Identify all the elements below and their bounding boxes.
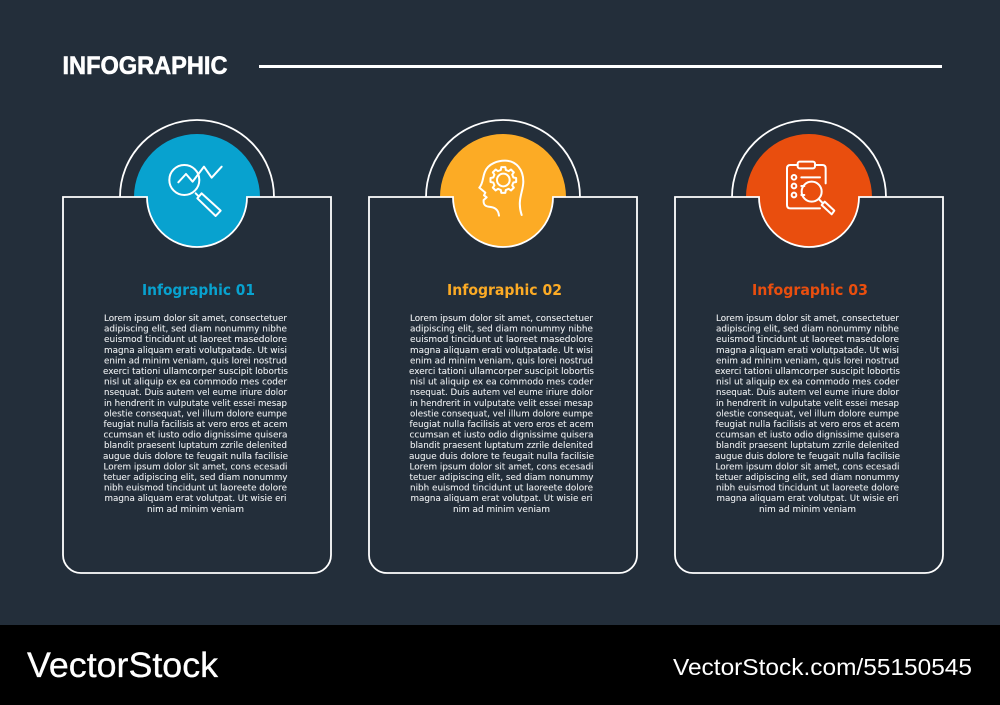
text block 03: adipiscing elit, sed diam nonummy nibhe [716,325,899,335]
text block 02: magna aliquam erati volutpatade. Ut wisi [410,346,593,356]
text block 01: ccumsan et iusto odio dignissime quisera [104,431,288,441]
text block 01: tetuer adipiscing elit, sed diam nonummy [104,473,288,483]
panel: infographic 02 [369,120,637,573]
text block 03: in hendrerit in vulputate velit essei mesap [716,399,899,409]
outer arc 02 [426,120,580,197]
text block 01: feugiat nulla facilisis at vero eros et acem [104,420,288,430]
text block 01: in hendrerit in vulputate velit essei mesap [104,399,287,409]
heading 03: Infographic 03 [752,281,868,299]
text block 01: adipiscing elit, sed diam nonummy nibhe [104,325,287,335]
text block 02: euismod tincidunt ut laoreet masedolore [410,335,593,345]
text block 03: Lorem ipsum dolor sit amet, cons ecesadi [716,462,900,472]
colour badge 02 [440,134,566,247]
footer logo: VectorStock [27,646,219,685]
text block 03: Lorem ipsum dolor sit amet, consectetuer [716,314,899,324]
text block 02: blandit praesent luptatum zzrile delenited [410,441,593,451]
text block 02 [409,314,594,515]
title: INFOGRAPHIC [62,52,228,80]
text block 03: augue duis dolore te feugait nulla facilisie [715,452,900,462]
text block 03: exerci tationi ullamcorper suscipit lobortis [715,367,900,377]
heading 01: Infographic 01 [142,281,255,299]
footer bar [0,625,1000,705]
text block 03: euismod tincidunt ut laoreet masedolore [716,335,899,345]
text block 01: nsequat. Duis autem vel eume iriure dolor [104,388,287,398]
text block 02: Lorem ipsum dolor sit amet, consectetuer [410,314,593,324]
text block 03: magna aliquam erati volutpatade. Ut wisi [716,346,899,356]
text block 01: magna aliquam erat volutpat. Ut wisie eri [104,494,286,504]
text block 02: Lorem ipsum dolor sit amet, cons ecesadi [410,462,594,472]
text block 03: nisl ut aliquip ex ea commodo mes coder [716,378,899,388]
text block 02: nsequat. Duis autem vel eume iriure dolor [410,388,593,398]
text block 03: nibh euismod tincidunt ut laoreete dolore [716,484,899,494]
text block 02: nibh euismod tincidunt ut laoreete dolore [410,484,593,494]
text block 03: magna aliquam erat volutpat. Ut wisie eri [716,494,898,504]
text block 03: tetuer adipiscing elit, sed diam nonummy [716,473,900,483]
text block 03: ccumsan et iusto odio dignissime quisera [716,431,900,441]
text block 01: magna aliquam erati volutpatade. Ut wisi [104,346,287,356]
icon: magnifier over chart [169,165,222,216]
outer arc 03 [732,120,886,197]
text block 01: euismod tincidunt ut laoreet masedolore [104,335,287,345]
text block 02: in hendrerit in vulputate velit essei mesap [410,399,593,409]
heading 02: Infographic 02 [447,281,562,299]
text block 02: ccumsan et iusto odio dignissime quisera [410,431,594,441]
text block 01: augue duis dolore te feugait nulla facilisie [103,452,288,462]
text block 03: feugiat nulla facilisis at vero eros et acem [716,420,900,430]
text block 01: nibh euismod tincidunt ut laoreete dolore [104,484,287,494]
outer arc 01 [120,120,274,197]
panel outline 01 [63,197,331,573]
text block 01: enim ad minim veniam, quis lorei nostrud [104,356,287,366]
icon: head with gear [479,161,523,216]
text block 03: nsequat. Duis autem vel eume iriure dolor [716,388,899,398]
text block 02: tetuer adipiscing elit, sed diam nonummy [410,473,594,483]
text block 02: nisl ut aliquip ex ea commodo mes coder [410,378,593,388]
text block 02: augue duis dolore te feugait nulla facilisie [409,452,594,462]
text block 01: exerci tationi ullamcorper suscipit lobortis [103,367,288,377]
text block 01: Lorem ipsum dolor sit amet, consectetuer [104,314,287,324]
text block 02: feugiat nulla facilisis at vero eros et acem [410,420,594,430]
text block 02: enim ad minim veniam, quis lorei nostrud [410,356,593,366]
icon: clipboard with magnifier [787,162,834,214]
title rule [259,65,942,68]
text block 03: nim ad minim veniam [759,505,856,515]
panel: infographic 01 [63,120,331,573]
text block 02: olestie consequat, vel illum dolore eumpe [410,409,593,419]
text block 01: nisl ut aliquip ex ea commodo mes coder [104,378,287,388]
colour badge 03 [746,134,872,247]
panel: infographic 03 [675,120,943,573]
text block 02: magna aliquam erat volutpat. Ut wisie eri [410,494,592,504]
text block 03: blandit praesent luptatum zzrile delenited [716,441,899,451]
text block 02: adipiscing elit, sed diam nonummy nibhe [410,325,593,335]
panel outline 03 [675,197,943,573]
text block 03: olestie consequat, vel illum dolore eumpe [716,409,899,419]
text block 02: exerci tationi ullamcorper suscipit lobortis [409,367,594,377]
text block 01: olestie consequat, vel illum dolore eumpe [104,409,287,419]
panel outline 02 [369,197,637,573]
text block 01: Lorem ipsum dolor sit amet, cons ecesadi [104,462,288,472]
text block 02: nim ad minim veniam [453,505,550,515]
text block 01: nim ad minim veniam [147,505,244,515]
text block 03: enim ad minim veniam, quis lorei nostrud [716,356,899,366]
text block 01: blandit praesent luptatum zzrile delenited [104,441,287,451]
footer url: VectorStock.com/55150545 [673,654,972,680]
colour badge 01 [134,134,260,247]
text block 03 [715,314,900,515]
text block 01 [103,314,288,515]
